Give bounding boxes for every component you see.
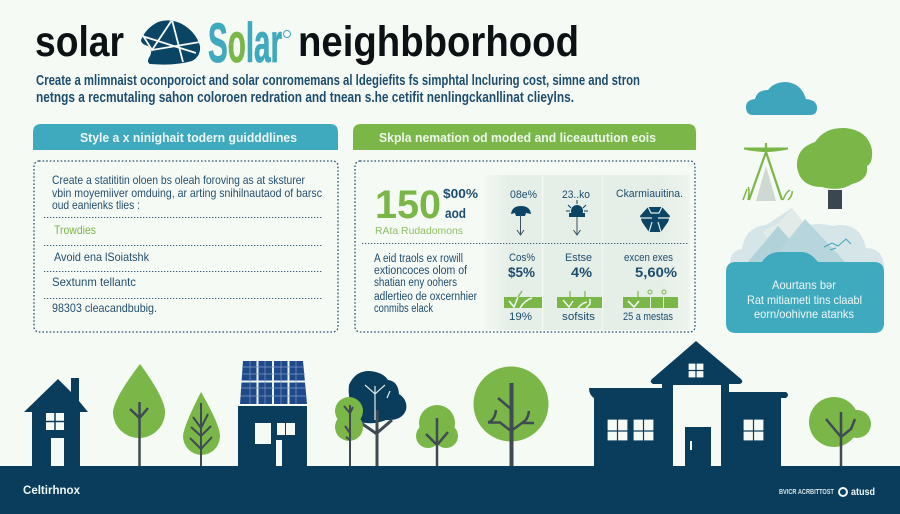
icon: large green tree	[797, 128, 872, 209]
card text: eorn/oohivne atanks	[754, 307, 854, 321]
bar captions	[509, 311, 673, 323]
list items	[52, 223, 157, 315]
big stat: 150: RAta Rudadomons	[375, 225, 463, 237]
panel heading: metrics	[353, 124, 696, 150]
lower row labels and values: 5,60%	[635, 264, 678, 280]
big stat: 150	[375, 183, 478, 237]
lower row labels and values: 4%	[571, 264, 593, 280]
title	[36, 20, 576, 65]
bar captions: sofsits	[562, 311, 596, 323]
intro text	[52, 173, 322, 212]
mountain card	[726, 208, 884, 333]
description text: A eid traols ex rowill	[374, 253, 463, 265]
panel heading: metrics: Skpla nemation od moded and liceautution eois	[379, 131, 656, 145]
title: neighbborhood	[298, 18, 579, 66]
icon: solar logo emblem	[141, 20, 200, 65]
list items: 98303 cleacandbubig.	[52, 301, 157, 315]
subtitle	[36, 73, 640, 106]
lower row labels and values: Cos%	[509, 252, 535, 264]
tree: navy with green sapling	[335, 371, 406, 466]
list items: Trowdies	[54, 223, 96, 237]
big stat: 150: aod	[445, 206, 466, 221]
house: solar roof	[238, 361, 307, 467]
intro text: vbin moyemiiver omduing, ar arting snihilnautaod of barsc	[52, 186, 322, 200]
top row labels: 08e%	[510, 189, 537, 201]
lower row labels and values: Estse	[565, 252, 592, 264]
logo word: Solar: Solar	[208, 11, 282, 74]
list items: Sextunm tellantc	[52, 275, 136, 289]
ground band	[0, 466, 900, 514]
tree: narrow leaf	[183, 392, 220, 466]
bar: cost	[504, 291, 542, 308]
description text: conmibs elack	[374, 303, 433, 315]
lower row labels and values: excen exes	[624, 252, 673, 264]
building: school	[589, 341, 788, 467]
subtitle: Create a mlimnaist oconporoict and solar conromemans al ldegiefits fs simphtal lncluring cost, simne and stron	[36, 73, 640, 89]
description text	[374, 253, 477, 315]
footer right credit: atusd	[851, 487, 875, 498]
lower row labels and values	[508, 252, 678, 280]
footer right credit	[779, 487, 875, 498]
top row labels: Ckarmiauitina.	[616, 188, 683, 200]
icon: umbrella	[511, 206, 531, 235]
footer left text: Celtirhnox	[23, 485, 81, 497]
top row labels: 23..ko	[562, 189, 590, 201]
description text: shatian eny oohers	[374, 277, 457, 289]
card text: Aourtans bər	[772, 278, 836, 292]
tree: large round	[474, 366, 548, 466]
house: left	[24, 378, 88, 467]
list items: Avoid ena lSoiatshk	[54, 250, 150, 264]
panel heading: style guidelines	[33, 124, 338, 150]
icon: sun	[566, 200, 588, 235]
panel: style guidelines	[33, 124, 338, 332]
icon: solar mast	[743, 143, 792, 201]
bar: excess	[623, 290, 678, 308]
intro text: oud eanienks tlies :	[52, 198, 140, 212]
tree: right	[809, 397, 871, 466]
bar captions: 25 a mestas	[623, 311, 673, 323]
icon: cloud	[746, 82, 817, 115]
bar captions: 19%	[509, 311, 532, 323]
big stat: 150: $00%	[443, 186, 478, 201]
title: solar	[35, 18, 124, 66]
intro text: Create a statititin oloen bs oleah foroving as at sksturer	[52, 173, 305, 187]
mountain scene	[730, 208, 884, 275]
subtitle: netngs a recmutaling sahon coloroen redration and tnean s.he cetifit nenlingckanllinat clieylns.	[36, 90, 574, 106]
description text: extioncoces olom of	[374, 265, 468, 277]
tree: small round	[416, 405, 458, 466]
description text: adlertieo de oxcernhier	[374, 291, 477, 303]
big stat: 150: 150	[375, 183, 441, 227]
bar: estate	[557, 291, 602, 308]
footer right credit: BVICR ACRBITTOST	[779, 489, 835, 496]
building windows	[607, 363, 764, 441]
lower row labels and values: $5%	[508, 264, 536, 280]
panel heading: style guidelines: Style a x ninighait todern guidddlines	[80, 131, 297, 145]
card text: Rat mitiameti tins claabl	[747, 293, 862, 307]
solar panels	[240, 361, 307, 404]
top row labels	[510, 188, 683, 201]
card text	[747, 278, 862, 321]
tree: teardrop	[113, 364, 165, 466]
panel: metrics	[353, 124, 696, 332]
icon: panel emblem	[640, 207, 670, 232]
